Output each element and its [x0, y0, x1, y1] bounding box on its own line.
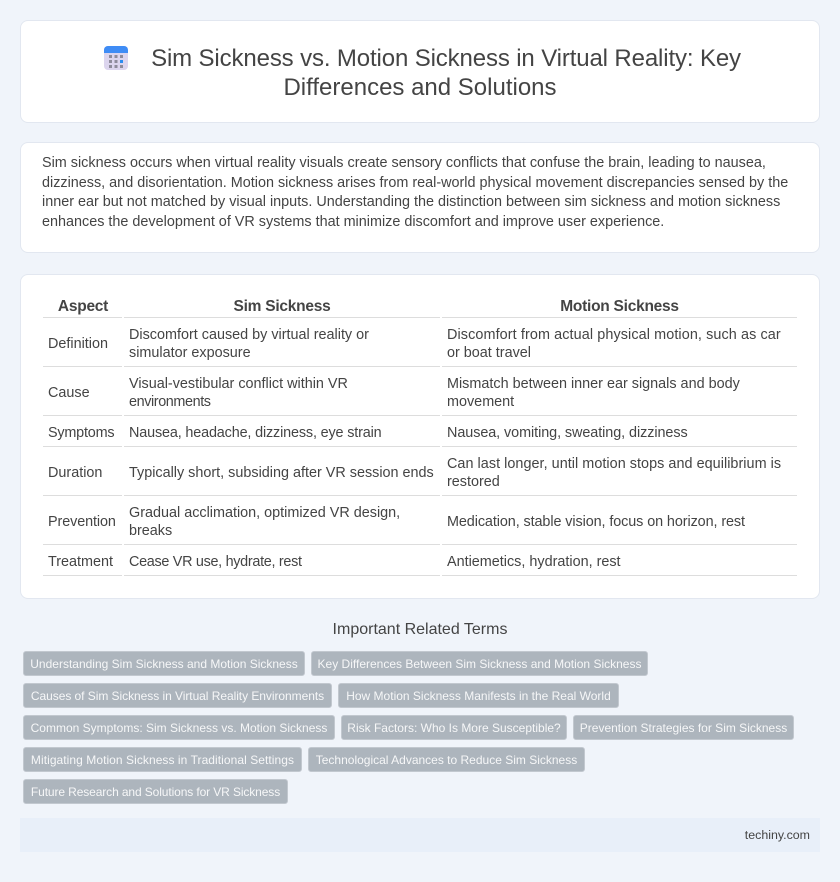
title line 2: Differences and Solutions: [283, 74, 557, 101]
tag: [341, 715, 567, 740]
tag: [23, 747, 302, 772]
Duration: motion: [447, 456, 781, 490]
panel: intro text: [20, 142, 820, 253]
tag: How Motion Sickness Manifests in the Real World: [346, 689, 611, 703]
Definition: motion: Discomfort from actual physical motion, such as car: [447, 327, 781, 343]
Cause: motion: Mismatch between inner ear signals and body: [447, 376, 740, 392]
Definition: sim: Discomfort caused by virtual reality or: [129, 327, 369, 343]
intro paragraph: dizziness, and disorientation. Motion sickness arises from real-world physical movement discrepancies sensed by the: [42, 174, 788, 190]
tag: Understanding Sim Sickness and Motion Sickness: [30, 657, 298, 671]
intro paragraph: enhances the development of VR systems that minimize discomfort and improve user experience.: [42, 214, 664, 230]
Cause: sim: [129, 376, 348, 410]
intro paragraph: [42, 155, 788, 230]
tag: [573, 715, 794, 740]
Prevention: sim: breaks: [129, 523, 172, 539]
Definition: motion: [447, 327, 781, 361]
Definition: motion: or boat travel: [447, 345, 531, 361]
Cause: motion: [447, 376, 740, 410]
Cause: sim: environments: [129, 394, 211, 410]
Symptoms: motion: Nausea, vomiting, sweating, dizziness: [447, 425, 688, 441]
Symptoms: sim: Nausea, headache, dizziness, eye strain: [129, 425, 382, 441]
panel: comparison table: [20, 274, 820, 599]
tag: [23, 683, 332, 708]
Prevention: sim: [129, 505, 400, 539]
Definition: sim: [129, 327, 369, 361]
Cause: motion: movement: [447, 394, 514, 410]
tag: Prevention Strategies for Sim Sickness: [580, 721, 787, 735]
footer bar: [20, 818, 820, 852]
tag: [23, 715, 335, 740]
tag: Technological Advances to Reduce Sim Sickness: [316, 753, 577, 767]
row: Prevention: Prevention: [48, 514, 116, 530]
table header: Aspect: Aspect: [58, 298, 108, 315]
table header: Motion Sickness: Motion Sickness: [560, 298, 679, 315]
tag: [23, 779, 288, 804]
intro paragraph: Sim sickness occurs when virtual reality visuals create sensory conflicts that confuse the brain, leading to nausea,: [42, 155, 766, 171]
tag: Future Research and Solutions for VR Sickness: [31, 785, 280, 799]
tag: Common Symptoms: Sim Sickness vs. Motion Sickness: [31, 721, 327, 735]
icon: calendar: [104, 46, 128, 70]
tag: [311, 651, 648, 676]
row: Treatment: Treatment: [48, 554, 113, 570]
table header: Sim Sickness: Sim Sickness: [234, 298, 330, 315]
Cause: sim: Visual-vestibular conflict within VR: [129, 376, 348, 392]
heading: related terms: Important Related Terms: [333, 621, 507, 638]
footer: source: techiny.com: [745, 828, 810, 842]
tag: Key Differences Between Sim Sickness and Motion Sickness: [318, 657, 641, 671]
tag: Mitigating Motion Sickness in Traditional Settings: [31, 753, 294, 767]
Treatment: motion: Antiemetics, hydration, rest: [447, 554, 621, 570]
tag: Causes of Sim Sickness in Virtual Reality Environments: [31, 689, 324, 703]
Duration: motion: Can last longer, until motion stops and equilibrium is: [447, 456, 781, 472]
tag: [23, 651, 305, 676]
title: Sim Sickness vs. Motion Sickness in Virtual Reality: Key: [151, 45, 741, 72]
panel: title card: [20, 20, 820, 123]
Prevention: sim: Gradual acclimation, optimized VR design,: [129, 505, 400, 521]
row: Symptoms: Symptoms: [48, 425, 114, 441]
Duration: sim: Typically short, subsiding after VR session ends: [129, 465, 434, 481]
tag: Risk Factors: Who Is More Susceptible?: [347, 721, 561, 735]
Definition: sim: simulator exposure: [129, 345, 251, 361]
intro paragraph: inner ear but not matched by visual inputs. Understanding the distinction between sim sickness and motion sickness: [42, 194, 780, 210]
Prevention: motion: Medication, stable vision, focus on horizon, rest: [447, 514, 745, 530]
tag: [338, 683, 619, 708]
row: Duration: Duration: [48, 465, 102, 481]
tag: [308, 747, 585, 772]
Duration: motion: restored: [447, 474, 500, 490]
Treatment: sim: Cease VR use, hydrate, rest: [129, 554, 302, 570]
row: Cause: Cause: [48, 385, 90, 401]
row: Definition: Definition: [48, 336, 108, 352]
